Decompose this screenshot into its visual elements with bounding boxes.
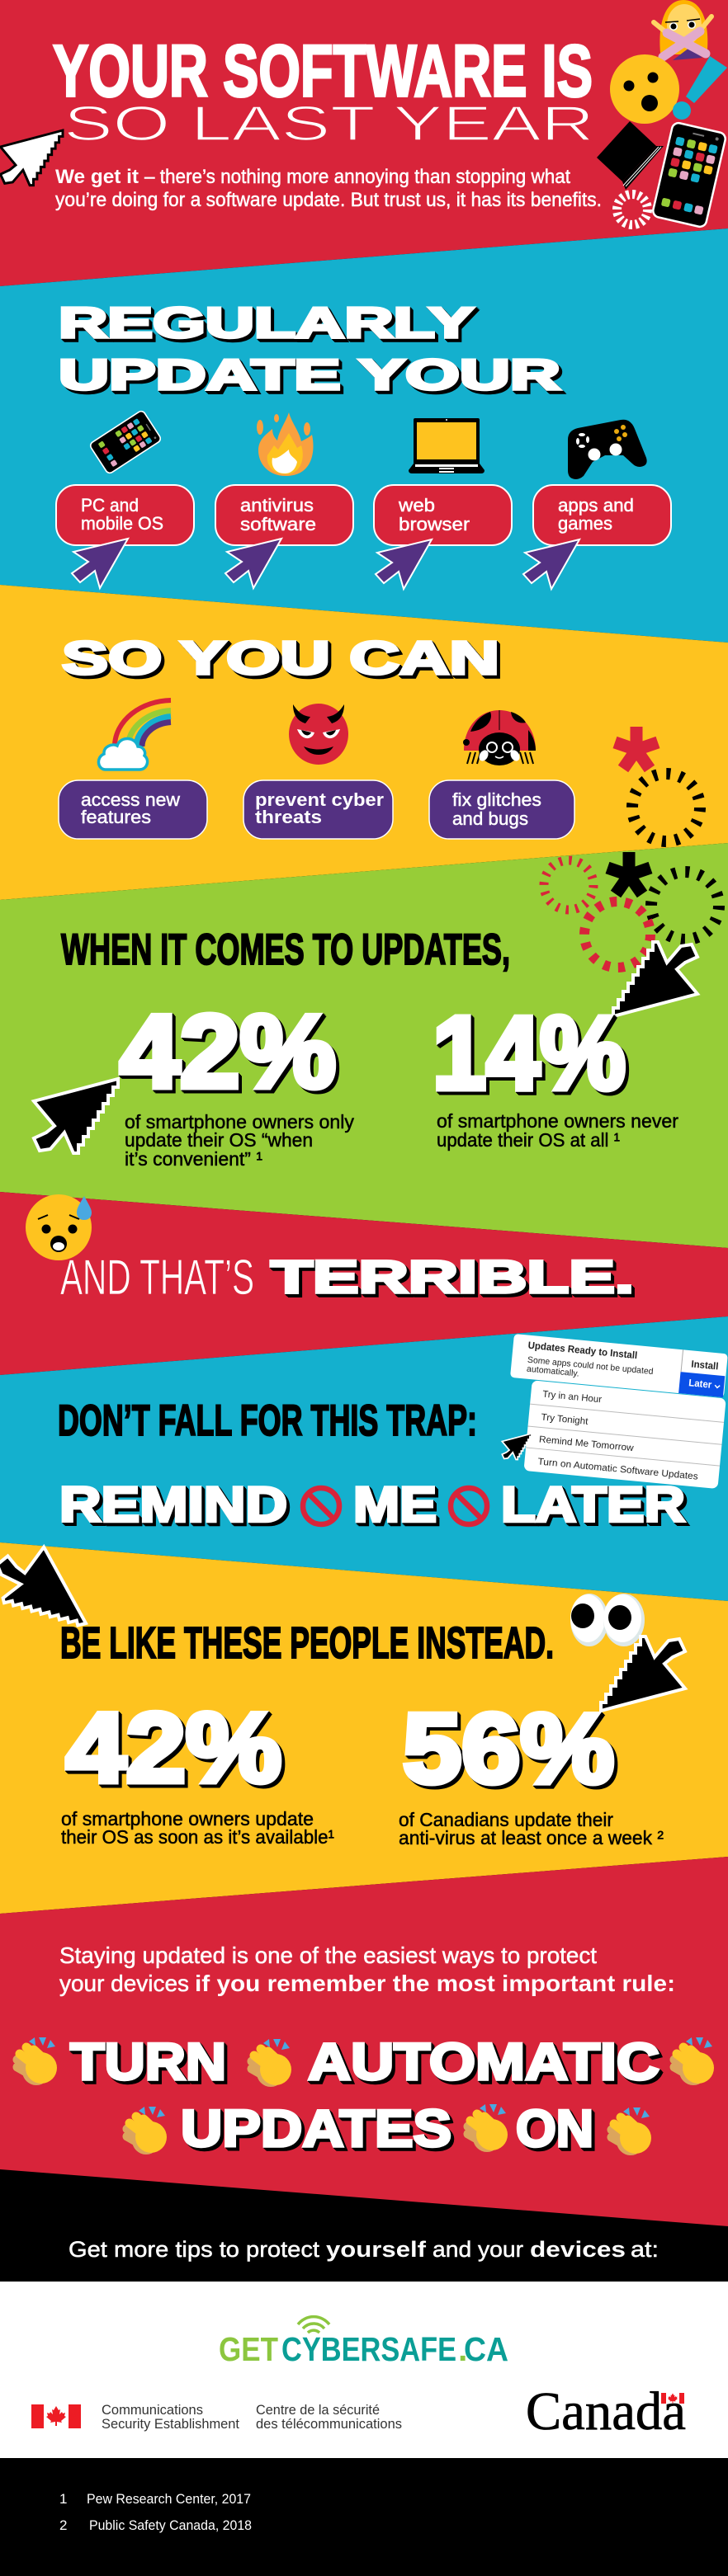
text: get more tips: at: [631, 2237, 659, 2262]
dialog: updates ready to install [502, 1334, 728, 1489]
footnotes: Public Safety Canada, 2018 [89, 2517, 252, 2533]
button: apps and games: apps and [558, 495, 634, 516]
icon: small cursor [502, 1434, 532, 1460]
button: antivirus software [215, 485, 353, 545]
stat: 56%: of Canadians update their [399, 1809, 613, 1830]
icon: smartphone [652, 122, 726, 228]
button: fix glitches and bugs [429, 780, 574, 839]
logo: getcybersafe.ca: CYBERSAFE [281, 2330, 456, 2368]
icon: black cursor pointing at 42% [34, 1079, 118, 1153]
footnotes: 1 [59, 2491, 67, 2507]
icon: black cursor pointing at 14% [613, 942, 697, 1016]
stat: 42%: of smartphone owners only [125, 1111, 354, 1133]
icon: rainbow and cloud [98, 700, 171, 770]
title [53, 30, 594, 151]
dialog: updates ready to install: Try in an Hour [542, 1390, 603, 1405]
icon: white pixel cursor [1, 130, 63, 186]
intro text: you’re doing for a software update. But trust us, it has its benefits. [55, 189, 602, 211]
stat: 56% [399, 1693, 664, 1848]
stat: 42%: update their OS “when [125, 1129, 313, 1151]
logo: communications security establishment: des télécommunications [256, 2416, 402, 2432]
dialog: updates ready to install: Some apps could not be updated [527, 1355, 654, 1377]
heading: remind me later: REMIND [59, 1476, 287, 1533]
icon: cursor pointing at 56% [601, 1636, 685, 1711]
arrows: purple pointers [72, 539, 579, 589]
text: get more tips: yourself [326, 2237, 427, 2262]
text: staying updated [59, 1943, 675, 1996]
logo: getcybersafe.ca [219, 2317, 508, 2368]
dialog: updates ready to install: Try Tonight [541, 1413, 589, 1427]
heading: turn automatic updates on [70, 2033, 659, 2158]
stat: 14%: of smartphone owners never [437, 1110, 678, 1132]
icon: eyes [570, 1594, 645, 1646]
button: web browser [374, 485, 512, 545]
button: access new features [59, 780, 207, 839]
heading: remind me later [59, 1476, 685, 1533]
button: access new features: access new [81, 789, 180, 810]
icon: flame [257, 412, 313, 476]
heading: remind me later: LATER [501, 1476, 685, 1533]
button: prevent cyber threats: threats [255, 807, 322, 827]
button: web browser: browser [399, 514, 470, 535]
text: get more tips: and your [433, 2237, 523, 2262]
text: staying updated: your devices [59, 1971, 189, 1996]
stat: 14% [433, 995, 678, 1151]
icon: laptop screen [409, 418, 485, 473]
stat: 42% update as soon as available [61, 1693, 334, 1848]
intro text: We get it [55, 166, 139, 188]
button: PC and mobile OS [56, 485, 194, 545]
dialog: updates ready to install: automatically. [526, 1364, 579, 1379]
title: SO LAST YEAR [64, 97, 594, 151]
logo: getcybersafe.ca: . [458, 2330, 467, 2368]
icon: laptop [597, 121, 664, 190]
logo: communications security establishment: Communications [102, 2402, 203, 2418]
icon: spinner [617, 195, 647, 224]
text: staying updated: Staying updated is one of the easiest ways to protect [59, 1943, 597, 1968]
logo: communications security establishment [31, 2402, 402, 2432]
icon: game controller [568, 420, 647, 479]
stat: 42%: 42% [120, 993, 336, 1109]
icon: phone [89, 410, 162, 474]
heading: turn automatic updates on: UPDATES [181, 2100, 451, 2158]
dialog: updates ready to install: Install [691, 1358, 719, 1372]
logo: communications security establishment: Security Establishment [102, 2416, 239, 2432]
text: get more tips: devices [530, 2237, 626, 2262]
stat: 42%: it’s convenient” ¹ [125, 1148, 262, 1170]
button: apps and games [533, 485, 671, 545]
stat: 42% update as soon as available: 42% [66, 1693, 281, 1803]
stat: 14%: 14% [433, 995, 626, 1111]
icon: ladybug [463, 710, 536, 765]
heading: and that's terrible: TERRIBLE. [271, 1250, 634, 1302]
heading: regularly update your: REGULARLY [59, 299, 474, 347]
button: prevent cyber threats [243, 780, 393, 839]
heading: when it comes to updates: WHEN IT COMES TO UPDATES, [61, 925, 510, 974]
stat: 56%: 56% [403, 1693, 614, 1804]
heading: regularly update your [59, 299, 560, 399]
heading: turn automatic updates on: AUTOMATIC [308, 2033, 659, 2091]
text: get more tips: Get more tips to protect [69, 2237, 320, 2262]
icon: cursor top left of yellow band [0, 1542, 86, 1641]
heading: and that's terrible: AND THAT’S [60, 1250, 254, 1305]
dialog: updates ready to install: Remind Me Tomorrow [538, 1434, 635, 1453]
button: fix glitches and bugs: and bugs [452, 808, 528, 829]
logo: getcybersafe.ca: GET [219, 2330, 278, 2368]
dialog: updates ready to install: Turn on Automatic Software Updates [537, 1457, 698, 1482]
text: staying updated: if you remember the most important rule: [195, 1971, 675, 1996]
button: antivirus software: antivirus [240, 495, 314, 516]
button: web browser: web [398, 495, 435, 516]
heading: and that's terrible [60, 1250, 634, 1305]
button: antivirus software: software [240, 514, 316, 535]
heading: don't fall for this trap: DON’T FALL FOR THIS TRAP: [58, 1396, 477, 1445]
button: access new features: features [81, 807, 151, 827]
dialog: updates ready to install: Updates Ready to Install [527, 1340, 638, 1361]
stat: 56%: anti-virus at least once a week ² [399, 1827, 664, 1848]
button: prevent cyber threats: prevent cyber [255, 789, 384, 810]
icon: exclamation mark [673, 56, 727, 120]
heading: regularly update your: UPDATE YOUR [59, 351, 560, 399]
button: PC and mobile OS: PC and [81, 495, 139, 516]
footnotes [59, 2491, 252, 2533]
icon: shocked face [610, 54, 679, 124]
button: fix glitches and bugs: fix glitches [452, 789, 541, 810]
stat: 14%: update their OS at all ¹ [437, 1129, 620, 1151]
heading: turn automatic updates on: ON [516, 2100, 593, 2158]
heading: so you can: SO YOU CAN [62, 632, 499, 685]
heading: remind me later: ME [353, 1476, 437, 1533]
logo: communications security establishment: Centre de la sécurité [256, 2402, 380, 2418]
icon: worried face [26, 1194, 92, 1260]
intro text: – there’s nothing more annoying than stopping what [144, 166, 570, 188]
stat: 42% [120, 993, 354, 1170]
heading: turn automatic updates on: TURN [70, 2033, 226, 2091]
button: PC and mobile OS: mobile OS [81, 513, 163, 534]
text: get more tips [69, 2237, 659, 2262]
footnotes: 2 [59, 2517, 67, 2533]
logo: getcybersafe.ca: CA [464, 2330, 508, 2368]
stat: 42% update as soon as available: of smartphone owners update [61, 1808, 314, 1830]
decoration: red asterisk and black ring [615, 727, 700, 841]
icon: woman crossing arms [654, 0, 711, 60]
stat: 42% update as soon as available: their OS as soon as it’s available¹ [61, 1826, 334, 1848]
button: apps and games: games [558, 513, 612, 534]
icons: clapping hands [17, 2037, 714, 2155]
footnotes: Pew Research Center, 2017 [87, 2491, 251, 2507]
decoration: rings and black asterisk [544, 852, 719, 968]
logo: canada wordmark: Canada [526, 2381, 686, 2442]
dialog: updates ready to install: Later [688, 1377, 712, 1391]
intro text [55, 166, 602, 211]
icon: devil [289, 704, 348, 765]
